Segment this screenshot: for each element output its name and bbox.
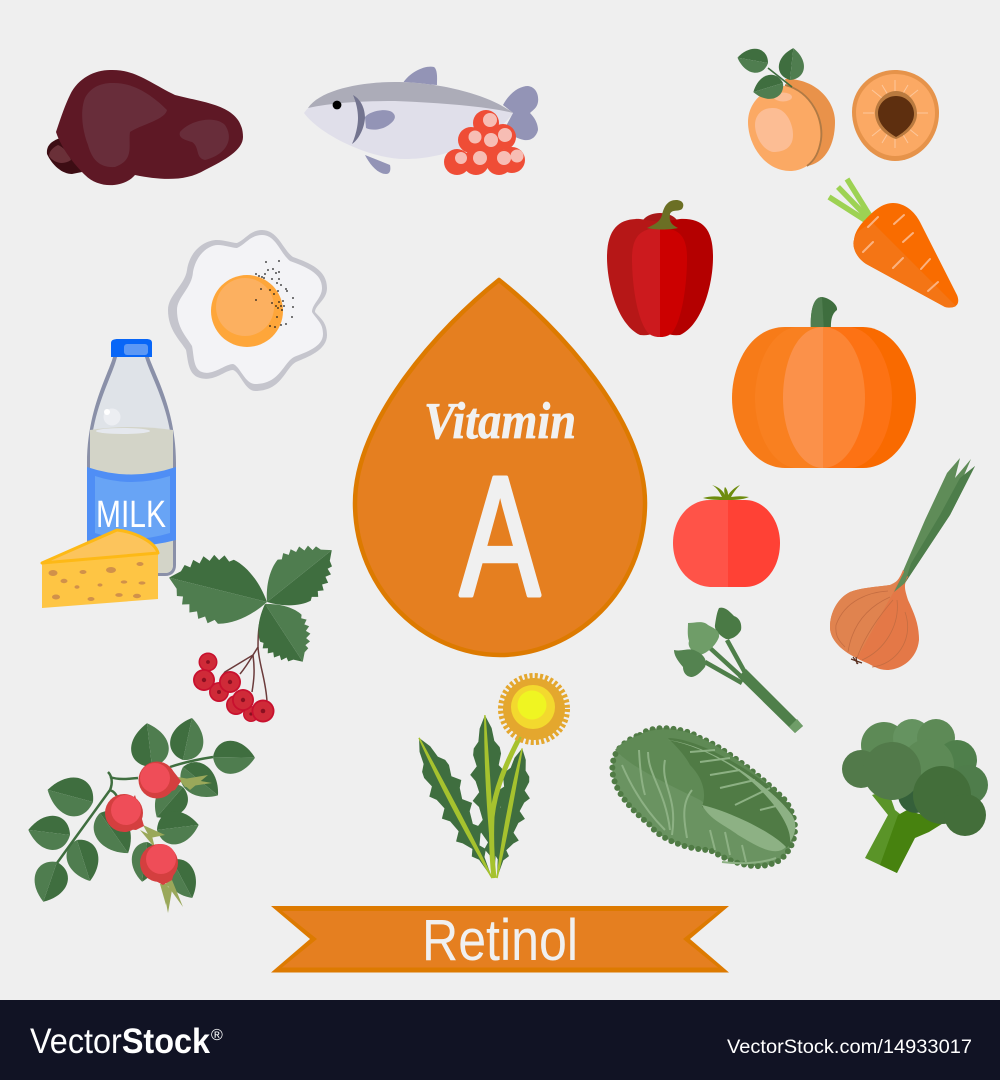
icon: cheese wedge: [42, 530, 158, 608]
footer bar: [0, 1000, 1000, 1080]
icon: tomato: [673, 485, 780, 587]
registered mark: ®: [211, 1027, 223, 1044]
icon: napa cabbage: [612, 728, 795, 866]
milk label text: MILK: [96, 494, 166, 536]
icon: fish with caviar: [304, 67, 538, 175]
icon: carrot: [829, 179, 958, 308]
icon: broccoli: [842, 719, 988, 873]
icon: red bell pepper: [607, 200, 713, 337]
footer logo: VectorStock: [30, 1022, 210, 1061]
banner text: Retinol: [422, 908, 578, 973]
icon: milk bottle: [87, 339, 176, 576]
letter A: A: [460, 442, 540, 632]
icon: halved apricot: [852, 70, 939, 161]
icon: whole apricot: [735, 46, 835, 171]
icon: fried egg: [168, 230, 327, 391]
icon: rowan branch with berries: [161, 528, 349, 722]
icon: liver: [47, 70, 243, 185]
icon: rose hip branch: [26, 715, 255, 913]
vitamin heading: Vitamin: [424, 393, 576, 450]
icon: celery: [674, 608, 803, 733]
icon: pumpkin: [732, 297, 916, 468]
footer image id: VectorStock.com/14933017: [727, 1037, 972, 1058]
icon: dandelion: [403, 676, 567, 886]
icon: spring onion: [830, 458, 975, 670]
ribbon banner: [271, 906, 729, 973]
central drop: [355, 280, 645, 655]
